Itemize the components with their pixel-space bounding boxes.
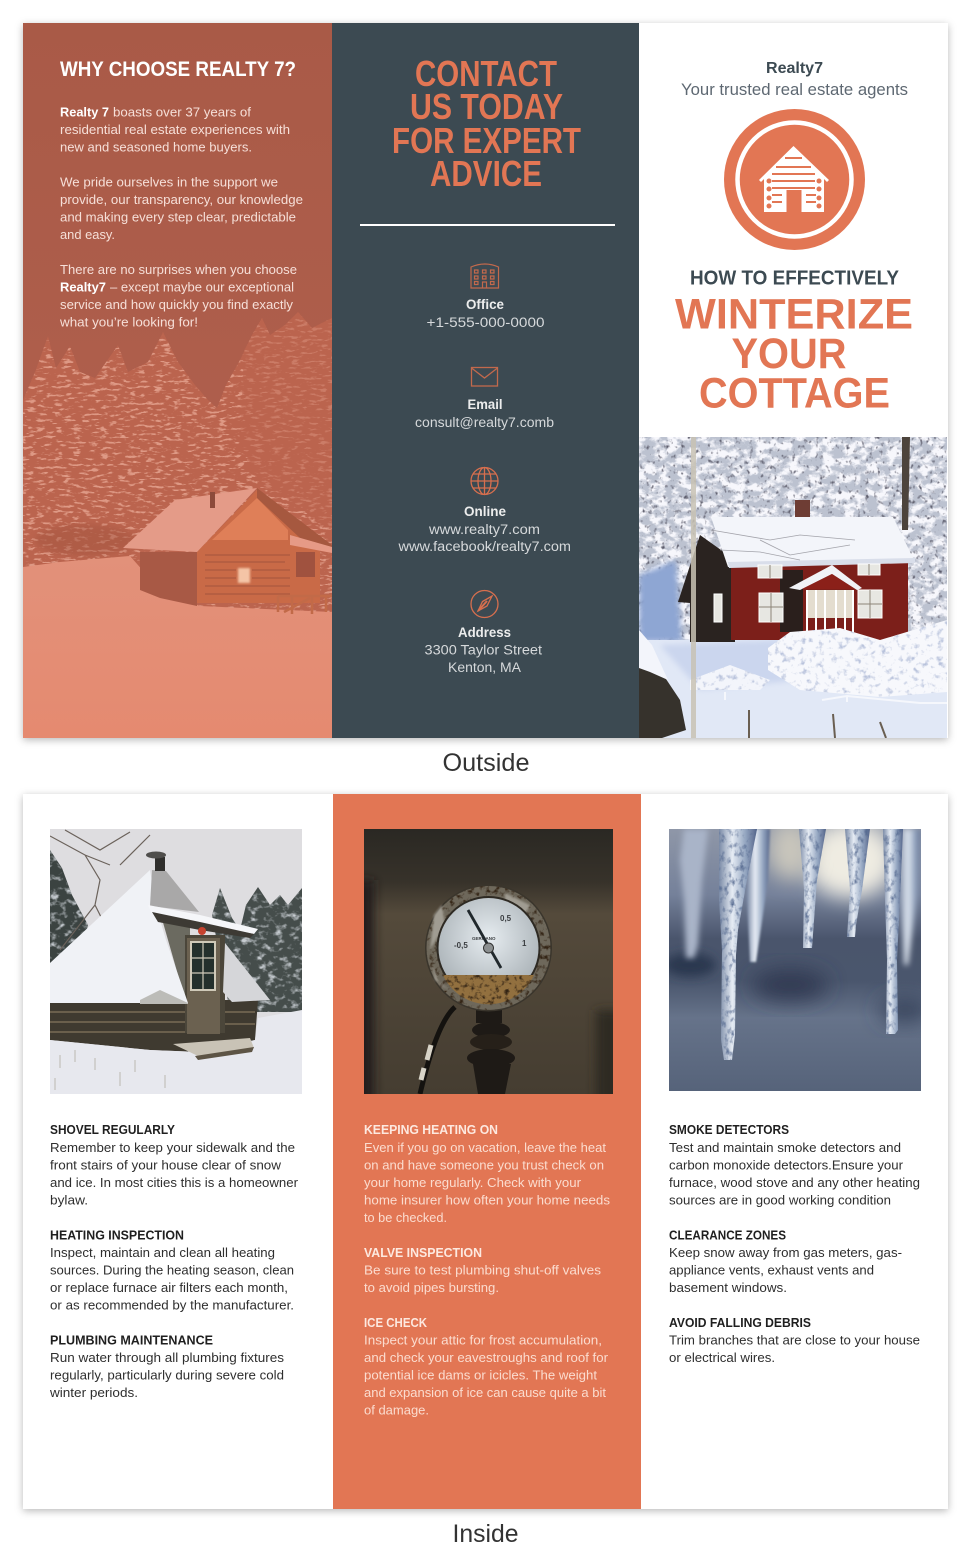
contact: online: www.facebook/realty7.com [397,539,571,554]
text: keeping heating on: your home regularly. Check with your [364,1175,582,1190]
text: avoid falling debris: AVOID FALLING DEBRIS [669,1315,811,1330]
title: winterize your cottage [675,290,913,418]
image: red house in snow [639,437,947,738]
contact: office: Office [466,297,504,312]
text: shovel regularly [50,1122,299,1208]
heading: how to effectively: HOW TO EFFECTIVELY [690,268,900,290]
text: about paragraphs: and easy. [60,227,115,242]
contact: email [415,397,554,430]
text: brand: Your trusted real estate agents [681,80,908,99]
text: shovel regularly: and ice. In most cities this is a homeowner [50,1175,299,1190]
text: about paragraphs: boasts over 37 years of [113,104,251,120]
text: plumbing maintenance [49,1332,285,1400]
icon: globe [471,468,498,494]
text: avoid falling debris: Trim branches that are close to your house [669,1332,920,1348]
contact: address: 3300 Taylor Street [424,642,542,658]
panel: cover [639,60,947,738]
contact: email: consult@realty7.comb [415,415,554,430]
text: smoke detectors: Test and maintain smoke detectors and [669,1140,901,1155]
text: about paragraphs: provide, our transparency, our knowledge [60,192,303,207]
text: keeping heating on: KEEPING HEATING ON [364,1122,498,1137]
contact: office [426,297,544,330]
text: smoke detectors: SMOKE DETECTORS [669,1122,789,1137]
text: avoid falling debris [669,1315,920,1365]
text: smoke detectors [669,1122,920,1208]
text: keeping heating on: home insurer how often your home needs [364,1192,611,1208]
text: valve inspection: to avoid pipes bursting. [364,1280,499,1295]
image: pressure gauge: -0,5 [454,941,468,950]
contact: online: www.realty7.com [428,522,540,537]
label: outside: Outside [442,749,530,777]
icon: compass [471,590,498,618]
text: shovel regularly: bylaw. [50,1192,88,1208]
heading: contact us today [392,53,581,194]
text: about paragraphs: Realty7 [60,280,106,294]
text: heating inspection: or as recommended by the manufacturer. [50,1298,294,1312]
heading: contact us today: CONTACT [415,53,557,94]
text: ice check: of damage. [364,1402,429,1418]
heading: contact us today: ADVICE [430,153,542,194]
title: winterize your cottage: COTTAGE [699,370,890,418]
text: clearance zones: basement windows. [669,1280,787,1295]
text: clearance zones: Keep snow away from gas meters, gas- [669,1245,902,1260]
text: keeping heating on: on and have someone you trust check on [364,1158,604,1172]
image: pressure gauge: GERMANO [472,936,496,941]
text: smoke detectors: furnace, wood stove and any other heating [669,1175,920,1190]
panel: centre column [333,794,641,1509]
text: heating inspection: HEATING INSPECTION [50,1228,184,1242]
text: brand [681,60,908,99]
text: ice check: potential ice dams or icicles. The weight [364,1368,597,1382]
image: pressure gauge [364,829,613,1094]
text: shovel regularly: Remember to keep your sidewalk and the [50,1140,295,1155]
panel: inside brochure sheet [23,794,948,1509]
panel: right column [664,820,931,1365]
text: valve inspection [364,1245,602,1295]
image: icicles [664,820,931,1091]
text: about paragraphs: Realty 7 [60,104,109,120]
text: about paragraphs: and making every step clear, predictable [60,210,296,224]
title: winterize your cottage: WINTERIZE [675,290,913,338]
text: ice check: ICE CHECK [364,1315,428,1330]
text: about paragraphs: There are no surprises when you choose [60,262,297,277]
text: heating inspection: Inspect, maintain and clean all heating [50,1245,275,1260]
text: ice check: Inspect your attic for frost accumulation, [364,1332,602,1348]
text: ice check: and check your eavestroughs and roof for [364,1350,609,1365]
contact: office: +1-555-000-0000 [426,315,544,330]
text: clearance zones [669,1228,902,1295]
text: about paragraphs: service and how quickly you find exactly [60,297,293,312]
panel: outside brochure sheet [23,23,948,738]
title: winterize your cottage: YOUR [732,330,846,378]
text: brand: Realty7 [766,60,823,77]
text: about paragraphs [59,104,303,330]
text: plumbing maintenance: Run water through all plumbing fixtures [50,1350,285,1365]
text: ice check [364,1315,609,1418]
icon: envelope [472,368,498,386]
text: shovel regularly: front stairs of your house clear of snow [50,1158,282,1172]
label: inside: Inside [452,1520,518,1548]
text: keeping heating on: Even if you go on vacation, leave the heat [364,1140,606,1155]
text: heating inspection: or replace furnace air filters each month, [50,1280,288,1295]
image: pressure gauge: 1 [522,939,527,948]
contact: address [424,625,542,675]
panel: contact [332,23,639,738]
text: heating inspection: sources. During the heating season, clean [50,1262,294,1278]
text: about paragraphs: – except maybe our exceptional [110,280,294,294]
text: clearance zones: appliance vents, exhaust vents and [669,1262,874,1278]
text: plumbing maintenance: regularly, particularly during severe cold [50,1368,284,1382]
icon: log cabin badge [724,109,865,250]
text: plumbing maintenance: PLUMBING MAINTENANCE [50,1332,213,1348]
text: plumbing maintenance: winter periods. [49,1385,138,1400]
text: smoke detectors: carbon monoxide detectors.Ensure your [669,1158,904,1172]
text: keeping heating on [364,1122,611,1225]
image: snowy hut [50,829,302,1094]
icon: office building [471,264,498,288]
contact: online [397,504,571,554]
image: pressure gauge: 0,5 [500,914,512,923]
text: heating inspection [50,1228,294,1312]
text: about paragraphs: new and seasoned home buyers. [60,140,252,154]
text: smoke detectors: sources are in good working condition [669,1192,891,1208]
text: clearance zones: CLEARANCE ZONES [669,1228,786,1242]
contact: online: Online [464,504,506,519]
text: avoid falling debris: or electrical wires. [669,1350,775,1365]
heading: why choose: WHY CHOOSE REALTY 7? [60,58,296,81]
text: valve inspection: Be sure to test plumbing shut-off valves [364,1262,602,1278]
text: keeping heating on: to be checked. [364,1210,447,1225]
text: valve inspection: VALVE INSPECTION [364,1245,482,1260]
text: about paragraphs: what you’re looking for! [59,314,198,330]
heading: contact us today: US TODAY [410,86,563,127]
text: shovel regularly: SHOVEL REGULARLY [50,1122,175,1137]
contact: address: Address [458,625,511,640]
heading: contact us today: FOR EXPERT [392,120,581,161]
panel: why choose Realty 7 [23,23,332,738]
text: about paragraphs: We pride ourselves in the support we [60,174,278,190]
panel: left column [49,829,302,1400]
text: ice check: and expansion of ice can cause quite a bit [364,1385,606,1400]
contact: address: Kenton, MA [448,660,521,675]
text: about paragraphs: residential real estate experiences with [60,122,290,137]
contact: email: Email [468,397,502,412]
image: snowy log cabin duotone [23,312,332,738]
